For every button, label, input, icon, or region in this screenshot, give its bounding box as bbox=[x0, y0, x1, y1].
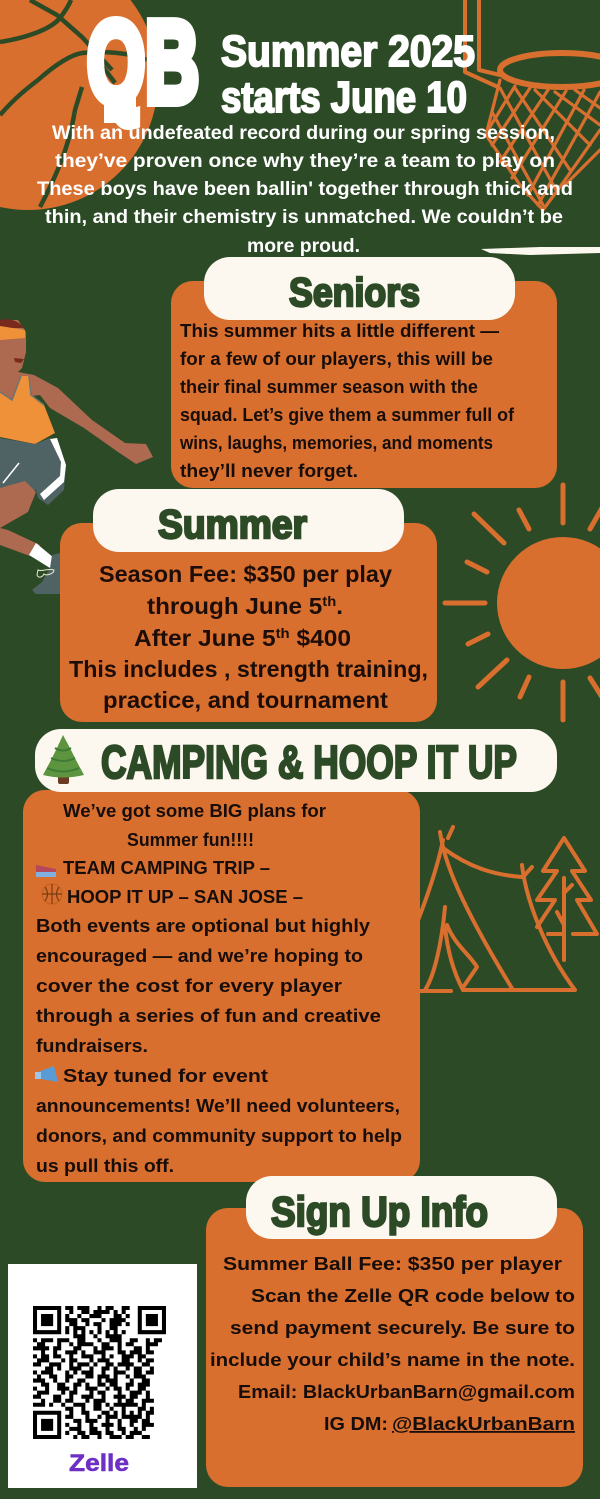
seniors text: their final summer season with the bbox=[180, 377, 478, 397]
camping text: HOOP IT UP – SAN JOSE – bbox=[67, 887, 303, 907]
summer fee text bbox=[69, 561, 428, 713]
panel: summer bbox=[60, 489, 437, 722]
summer heading pill: Summer bbox=[158, 503, 307, 547]
intro text bbox=[37, 123, 573, 257]
camping text: through a series of fun and creative bbox=[36, 1006, 381, 1026]
Zelle logo: Zelle bbox=[69, 1450, 129, 1477]
title: QB: QB bbox=[87, 0, 199, 127]
icon: camping emoji bbox=[36, 865, 56, 877]
camping text: fundraisers. bbox=[36, 1036, 148, 1056]
panel: seniors bbox=[171, 257, 557, 488]
intro text: These boys have been ballin' together through thick and bbox=[37, 179, 573, 200]
camping text: announcements! We’ll need volunteers, bbox=[36, 1096, 400, 1116]
camping heading pill bbox=[35, 729, 557, 792]
icon: tent and pine tree bbox=[390, 827, 597, 991]
title: summer date: starts June 10 bbox=[221, 73, 467, 122]
panel: sign up info bbox=[206, 1176, 583, 1487]
panel: camping and hoop it up bbox=[23, 729, 557, 1182]
summer fee text: Season Fee: $350 per play bbox=[99, 561, 392, 587]
sign up text: Email: BlackUrbanBarn@gmail.com bbox=[238, 1382, 575, 1402]
icon: pine tree emoji bbox=[43, 735, 84, 784]
sign up text: include your child’s name in the note. bbox=[210, 1350, 575, 1370]
summer fee text: After June 5 bbox=[134, 625, 267, 651]
seniors text: wins, laughs, memories, and moments bbox=[179, 433, 493, 453]
camping text: TEAM CAMPING TRIP – bbox=[63, 858, 270, 878]
title: summer date bbox=[221, 27, 475, 122]
sign up text: Summer Ball Fee: $350 per player bbox=[223, 1254, 562, 1274]
seniors text: This summer hits a little different — bbox=[180, 321, 499, 341]
camping text: Stay tuned for event bbox=[63, 1066, 268, 1086]
summer fee text: through June 5 bbox=[147, 593, 313, 619]
camping text: us pull this off. bbox=[36, 1156, 174, 1176]
decorative brush stroke bbox=[481, 247, 600, 255]
summer fee text: . bbox=[336, 593, 343, 619]
summer fee text: th bbox=[276, 625, 290, 641]
intro text: With an undefeated record during our spring session, bbox=[52, 123, 555, 144]
title: summer date: Summer 2025 bbox=[221, 27, 475, 76]
sign up heading pill bbox=[246, 1176, 557, 1239]
seniors text: squad. Let’s give them a summer full of bbox=[180, 405, 515, 425]
seniors heading pill bbox=[204, 257, 515, 320]
intro text: they’ve proven once why they’re a team to play on bbox=[55, 151, 555, 172]
sign up text bbox=[210, 1254, 575, 1434]
title: QB bbox=[87, 0, 199, 127]
summer fee text: This includes , strength training, bbox=[69, 656, 428, 682]
seniors text: for a few of our players, this will be bbox=[180, 349, 493, 369]
QR code bbox=[33, 1306, 166, 1439]
icon: basketball player bbox=[0, 319, 153, 594]
sign up text: send payment securely. Be sure to bbox=[230, 1318, 575, 1338]
seniors heading pill: Seniors bbox=[289, 271, 420, 315]
camping text: We’ve got some BIG plans for bbox=[63, 801, 326, 821]
summer heading pill bbox=[93, 489, 404, 552]
summer fee text: practice, and tournament bbox=[103, 687, 388, 713]
icon: sun bbox=[445, 485, 600, 720]
camping text: donors, and community support to help bbox=[36, 1126, 402, 1146]
sign up text: IG DM: bbox=[324, 1414, 388, 1434]
sign up text: Scan the Zelle QR code below to bbox=[251, 1286, 575, 1306]
sign up heading pill: Sign Up Info bbox=[271, 1188, 488, 1235]
summer fee text: th bbox=[322, 593, 336, 609]
sign up text: @BlackUrbanBarn bbox=[392, 1414, 575, 1434]
camping text: encouraged — and we’re hoping to bbox=[36, 946, 363, 966]
intro text: more proud. bbox=[247, 236, 360, 257]
seniors text: they’ll never forget. bbox=[180, 461, 358, 481]
intro text: thin, and their chemistry is unmatched. We couldn’t be bbox=[45, 207, 563, 228]
seniors text bbox=[179, 321, 515, 481]
camping text: Both events are optional but highly bbox=[36, 916, 370, 936]
icon: basketball emoji bbox=[42, 884, 62, 904]
icon: megaphone emoji bbox=[35, 1066, 58, 1082]
Zelle QR code card bbox=[8, 1264, 197, 1488]
summer fee text: $400 bbox=[290, 625, 351, 651]
camping text: cover the cost for every player bbox=[36, 976, 342, 996]
icon: basketball bbox=[0, 0, 158, 210]
icon: basketball hoop bbox=[465, 0, 600, 210]
camping text: Summer fun!!!! bbox=[127, 830, 254, 850]
camping text bbox=[36, 801, 402, 1176]
